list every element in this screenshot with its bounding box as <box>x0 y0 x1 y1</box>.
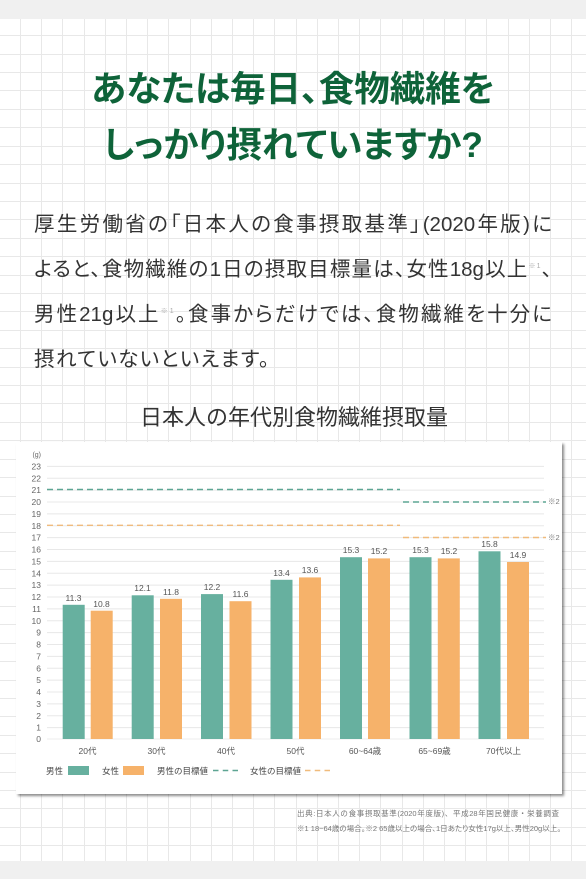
title <box>91 69 495 165</box>
x axis labels: 40代 <box>217 746 235 756</box>
y axis labels: 17 <box>32 533 41 543</box>
y axis labels: 12 <box>32 592 41 602</box>
y axis labels: 8 <box>36 640 41 650</box>
y axis labels: 0 <box>36 734 41 744</box>
legend <box>46 766 330 776</box>
value labels: 11.6 <box>233 589 249 599</box>
y axis labels: 23 <box>32 461 41 471</box>
y axis labels: 6 <box>36 663 41 673</box>
title: あなたは毎日、食物繊維を <box>91 69 495 109</box>
y axis labels: 10 <box>32 616 41 626</box>
value labels: 15.3 <box>343 545 360 555</box>
value labels <box>66 539 527 609</box>
y axis labels: 11 <box>32 604 41 614</box>
chart heading: 日本人の年代別食物繊維摂取量 <box>140 405 448 430</box>
y axis labels: 4 <box>36 687 41 697</box>
y axis labels: 1 <box>36 723 41 733</box>
legend: 男性の目標値 <box>157 766 209 776</box>
y axis labels: 13 <box>32 580 41 590</box>
source notes <box>297 809 561 833</box>
value labels: 11.8 <box>163 587 179 597</box>
y axis labels: 18 <box>32 521 41 531</box>
panel: chart card: ※2 <box>548 497 560 506</box>
bars: male <box>63 551 500 739</box>
value labels: 12.2 <box>204 582 221 592</box>
x axis labels: 65~69歳 <box>418 746 451 756</box>
y axis labels: 20 <box>32 497 41 507</box>
panel: chart card <box>16 442 566 798</box>
title: しっかり摂れていますか? <box>103 125 483 165</box>
x axis labels <box>79 746 521 756</box>
y axis labels: 3 <box>36 699 41 709</box>
intro text block: 摂れていないといえます。 <box>34 348 269 371</box>
intro text block <box>34 213 552 371</box>
x axis labels: 50代 <box>287 746 305 756</box>
source notes: ※1 18~64歳の場合。※2 65歳以上の場合、1日あたり女性17g以上、男性20g以上。 <box>297 824 561 833</box>
value labels: 13.4 <box>273 568 290 578</box>
value labels: 11.3 <box>66 593 82 603</box>
y axis labels: 2 <box>36 711 41 721</box>
legend: 男性 <box>46 766 64 776</box>
target lines <box>47 490 546 538</box>
source notes: 出典:日本人の食事摂取基準(2020年度版)、平成28年国民健康・栄養調査 <box>297 809 559 818</box>
panel: chart card: ※2 <box>548 533 560 542</box>
y axis labels: 21 <box>32 485 41 495</box>
y axis labels: 5 <box>36 675 41 685</box>
y axis labels: 7 <box>36 651 41 661</box>
value labels: 14.9 <box>510 550 527 560</box>
y axis labels: 22 <box>32 473 41 483</box>
value labels: 10.8 <box>93 599 110 609</box>
value labels: 15.2 <box>371 546 388 556</box>
intro text block: 男性21g以上※1。食事からだけでは、食物繊維を十分に <box>34 303 552 326</box>
x axis labels: 20代 <box>79 746 97 756</box>
value labels: 13.6 <box>302 565 319 575</box>
value labels: 15.3 <box>412 545 429 555</box>
y axis labels: 16 <box>32 544 41 554</box>
gridlines <box>47 466 544 739</box>
y axis labels: 9 <box>36 628 41 638</box>
x axis labels: 30代 <box>148 746 166 756</box>
y axis labels: 14 <box>32 568 41 578</box>
y axis labels: 19 <box>32 509 41 519</box>
y axis labels: 15 <box>32 556 41 566</box>
value labels: 12.1 <box>134 583 151 593</box>
bars: female <box>91 558 529 739</box>
x axis labels: 60~64歳 <box>349 746 382 756</box>
legend: 女性の目標値 <box>250 766 302 776</box>
value labels: 15.2 <box>441 546 458 556</box>
value labels: 15.8 <box>481 539 498 549</box>
intro text block: 厚生労働省の「日本人の食事摂取基準」(2020年版)に <box>34 213 552 236</box>
intro text block: よると、食物繊維の1日の摂取目標量は、女性18g以上※1、 <box>34 258 552 281</box>
legend: 女性 <box>102 766 120 776</box>
x axis labels: 70代以上 <box>486 746 521 756</box>
y axis labels: (g) <box>32 452 41 459</box>
y axis labels <box>32 452 41 744</box>
